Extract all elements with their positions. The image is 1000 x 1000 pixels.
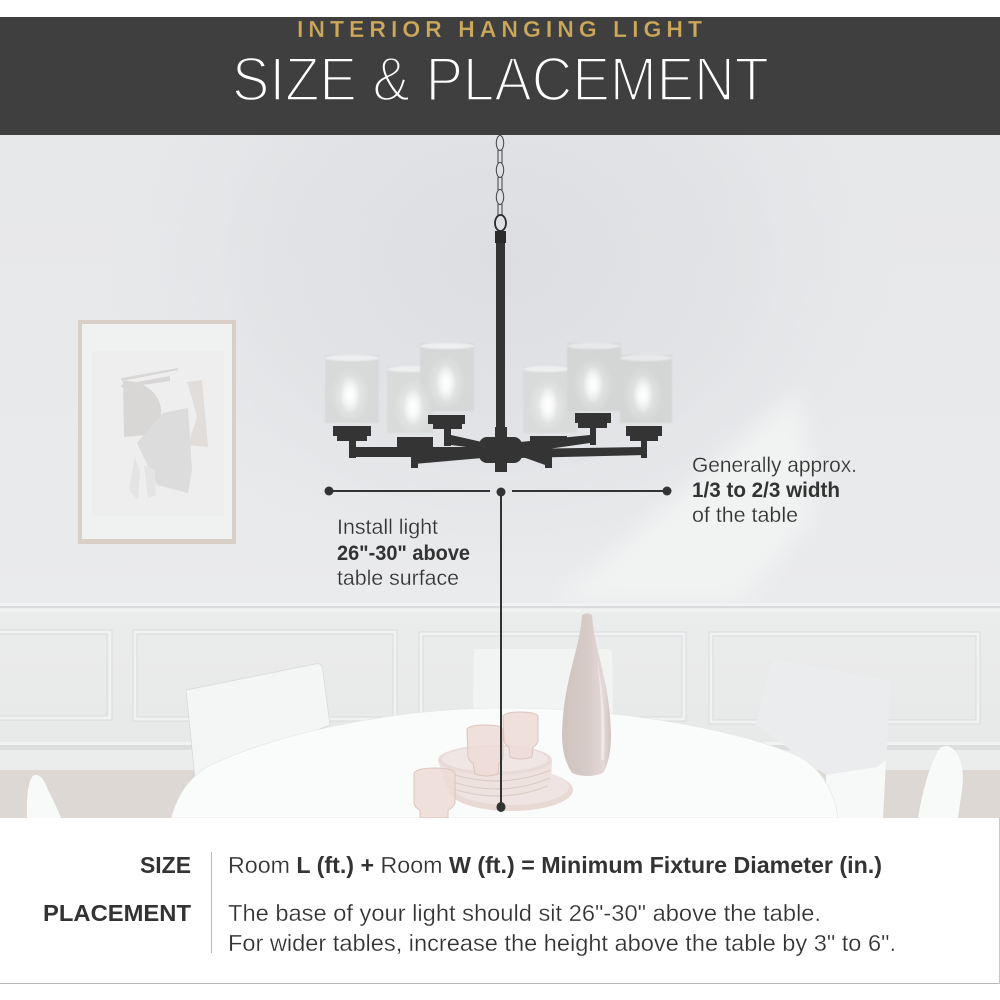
chandelier xyxy=(325,136,672,472)
callout: install height: Install light xyxy=(337,516,438,539)
measurement line: fixture width xyxy=(324,486,672,496)
footer panel xyxy=(0,818,1000,1000)
title: SIZE & PLACEMENT xyxy=(232,44,769,114)
left chair xyxy=(186,664,330,778)
placement row: For wider tables, increase the height above the table by 3" to 6". xyxy=(228,930,896,956)
round white table xyxy=(171,708,838,818)
callout: install height: table surface xyxy=(337,567,459,590)
eyebrow: INTERIOR HANGING LIGHT xyxy=(297,16,702,42)
measurement line: height above table xyxy=(496,488,506,812)
size row: Room L (ft.) + Room W (ft.) = Minimum Fixture Diameter (in.) xyxy=(228,852,882,878)
chain xyxy=(496,136,504,216)
callout: width of table xyxy=(692,454,857,527)
small front chairs xyxy=(27,746,963,818)
plates stack xyxy=(438,745,573,811)
room photo background xyxy=(0,134,1000,818)
flame glows xyxy=(330,355,663,435)
framed wall art xyxy=(78,320,236,544)
callout: width of table: 1/3 to 2/3 width xyxy=(692,479,840,502)
callout: width of table: Generally approx. xyxy=(692,454,857,477)
header band xyxy=(0,16,1000,135)
vase xyxy=(562,614,611,776)
callout: width of table: of the table xyxy=(692,504,798,527)
rod and ring xyxy=(495,215,506,472)
placement row: The base of your light should sit 26"-30" above the table. xyxy=(228,900,821,926)
back chair xyxy=(473,649,613,715)
size row: SIZE xyxy=(140,852,191,878)
right chair xyxy=(756,659,890,818)
callout: install height: 26"-30" above xyxy=(337,542,470,565)
arms and cups xyxy=(333,413,662,472)
placement row xyxy=(43,900,896,956)
drinking glasses xyxy=(414,712,538,818)
glass shades xyxy=(325,343,672,433)
callout: install height xyxy=(337,516,470,590)
placement row: PLACEMENT xyxy=(43,900,191,926)
